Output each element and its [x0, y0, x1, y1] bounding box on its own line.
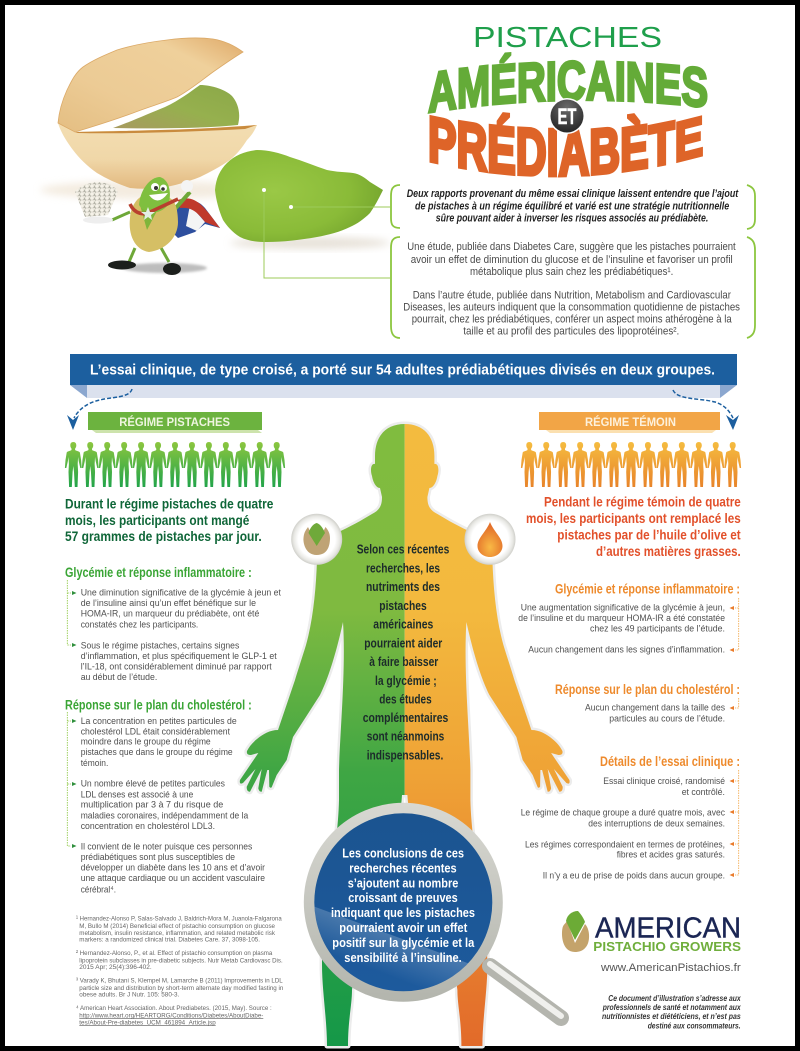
study descriptions: [403, 241, 740, 337]
footnotes: tes/About-Pre-diabetes_UCM_461894_Article.jsp: [79, 1019, 216, 1026]
lens text: recherches récentes: [349, 861, 457, 875]
center body text: indispensables.: [367, 748, 443, 762]
title line: prédiabète: P: [428, 103, 456, 180]
title: [428, 22, 708, 190]
disclaimer: nutritionnistes et diététiciens, et n’est pas: [602, 1012, 741, 1021]
title line: prédiabète: R: [456, 107, 487, 185]
icon: pistachio badge: [291, 514, 342, 565]
heading: cholesterol: Réponse sur le plan du cholestérol :: [555, 682, 740, 697]
footnotes: M, Bullo M (2014) Beneficial effect of pistachio consumption on glucose: [79, 923, 275, 930]
title line: pistaches: PISTACHES: [473, 22, 662, 54]
center body text: pourraient aider: [364, 636, 442, 650]
title line: américaines: I: [546, 51, 557, 113]
study descriptions: pourrait, chez les prédiabétiques, conférer un aspect moins athérogène à la: [412, 314, 732, 326]
illustration: pistachio kernel with callout lines: [215, 150, 390, 278]
logo: American Pistachio Growers: [562, 911, 741, 954]
text: glycemia findings: HOMA-IR, un marqueur du prédiabète, ont été: [81, 609, 259, 620]
text: cholesterol findings: moindre dans le groupe du régime: [81, 737, 211, 748]
study descriptions: métabolique plus sain chez les prédiabétiques¹.: [470, 266, 673, 278]
heading: pistachio diet statement: Durant le régime pistaches de quatre: [65, 495, 273, 511]
lens handle: [490, 964, 561, 1018]
study descriptions: avoir un effet de diminution du glucose et de l’insuline et favoriser un profil: [411, 254, 733, 266]
text: cholesterol findings: particules au cours de l’étude.: [609, 714, 725, 725]
icon: oil drop badge: [464, 514, 516, 565]
lens text: s’ajoutent au nombre: [348, 876, 458, 890]
text: cholesterol findings: maladies coronaires, indépendamment de la: [81, 810, 249, 821]
center body text: Selon ces récentes: [357, 542, 449, 556]
center body text: recherches, les: [366, 561, 440, 575]
text: trial details: Essai clinique croisé, randomisé: [603, 776, 725, 787]
lens text: pourraient avoir un effet: [339, 921, 468, 935]
title line: américaines: [428, 50, 708, 125]
text: glycemia findings: [81, 588, 281, 683]
heading: control diet statement: d’autres matières grasses.: [596, 543, 741, 559]
text: cholesterol findings: cholestérol LDL était considérablement: [81, 726, 230, 737]
website url: www.AmericanPistachios.fr: [600, 962, 741, 974]
text: cholesterol findings: développer un diabète dans les 10 ans et d’avoir: [81, 863, 266, 874]
footnotes: ¹ Hernandez-Alonso P, Salas-Salvado J, Baldrich-Mora M, Juanola-Falgarona: [76, 916, 282, 923]
title line: américaines: A: [428, 59, 457, 125]
heading: control diet statement: mois, les participants ont remplacé les: [526, 510, 741, 526]
text: cholesterol findings: une attaque cardiaque ou un accident vasculaire: [81, 873, 265, 884]
text: cholesterol findings: Il convient de le noter puisque ces personnes: [81, 842, 252, 853]
lens text: [331, 846, 475, 965]
title line: américaines: A: [586, 50, 615, 113]
center body text: sont néanmoins: [367, 730, 444, 744]
lens text: sensibilité à l’insuline.: [344, 951, 462, 965]
text: trial details: Il n’y a eu de prise de poids dans aucun groupe.: [543, 871, 725, 882]
logo subtitle: PISTACHIO GROWERS: [593, 939, 741, 954]
text: glycemia findings: Sous le régime pistaches, certains signes: [81, 641, 239, 652]
disclaimer: Ce document d’illustration s’adresse aux: [608, 994, 741, 1003]
title badge: et: ET: [558, 104, 577, 129]
text: trial details: des interruptions de deux semaines.: [588, 818, 725, 829]
heading: pistachio diet statement: 57 grammes de pistaches par jour.: [65, 528, 262, 544]
text: glycemia findings: chez les 49 participants de l’étude.: [590, 624, 725, 635]
heading: control diet statement: Pendant le régime témoin de quatre: [544, 494, 741, 510]
study descriptions: Diseases, les auteurs indiquent que la consommation quotidienne de pistaches: [403, 302, 740, 314]
heading: control diet statement: pistaches par de l’huile d’olive et: [557, 526, 741, 542]
panel: pistachio diet results: [65, 565, 281, 895]
center body text: [357, 542, 449, 762]
footnotes: obese adults. Br J Nutr. 105: 580-3.: [79, 992, 179, 999]
title line: américaines: N: [626, 51, 655, 115]
center body text: la glycémie ;: [375, 674, 437, 688]
heading: glycemia: Glycémie et réponse inflammatoire :: [65, 565, 252, 580]
banner: L’essai clinique, de type croisé, a porté sur 54 adultes prédiabétiques divisés en deux groupes.: [90, 361, 715, 378]
magnifying glass callout: [304, 803, 561, 1018]
title line: prédiabète: A: [558, 115, 589, 190]
heading: pistachio diet statement: [65, 495, 273, 544]
label: pistachio diet: RÉGIME PISTACHES: [119, 414, 230, 429]
heading: control diet statement: [526, 494, 741, 559]
disclaimer: destiné aux consommateurs.: [648, 1021, 741, 1030]
text: cholesterol findings: multiplication par 3 à 7 du risque de: [81, 800, 223, 811]
label: control diet: RÉGIME TÉMOIN: [585, 414, 676, 429]
title line: prédiabète: D: [516, 115, 547, 190]
bracket: right top: [747, 185, 755, 229]
intro summary: [407, 188, 739, 225]
panel: control diet results: [518, 581, 740, 882]
footnotes: [76, 916, 283, 1026]
text: glycemia findings: de l’insuline et du marqueur HOMA-IR a été constatée: [518, 613, 725, 624]
footnotes: lipoprotein subclasses in pre-diabetic subjects. Nutr Metab Cardiovasc Dis.: [79, 958, 283, 965]
text: glycemia findings: constatés chez les participants.: [81, 620, 198, 631]
text: cholesterol findings: La concentration en petites particules de: [81, 716, 237, 727]
center body text: des études: [379, 692, 432, 706]
title line: américaines: M: [457, 55, 490, 121]
text: cholesterol findings: Un nombre élevé de petites particules: [81, 779, 225, 790]
title badge: et: [549, 98, 585, 134]
text: glycemia findings: Aucun changement dans les signes d’inflammation.: [528, 645, 725, 656]
label: control diet: [539, 412, 720, 433]
title line: prédiabète: È: [620, 112, 649, 185]
title line: américaines: R: [517, 51, 546, 115]
title line: prédiabète: [428, 103, 703, 190]
body: right orange half: [405, 424, 570, 1046]
footnotes: metabolism, insulin resistance, inflammation, and related metabolic risk: [79, 930, 276, 937]
text: cholesterol findings: pistaches que dans le groupe du régime: [81, 747, 233, 758]
title line: américaines: C: [557, 50, 586, 113]
text: cholesterol findings: cérébral⁴.: [81, 884, 116, 895]
people: control group: [521, 442, 741, 487]
logo wordmark: AMERICAN: [595, 913, 741, 945]
title line: américaines: S: [681, 55, 708, 120]
bullets: [730, 606, 734, 877]
text: glycemia findings: de l’insuline ainsi qu’un effet bénéfique sur le: [81, 598, 256, 609]
banner: [70, 354, 737, 398]
body silhouette: [240, 424, 570, 1046]
text: cholesterol findings: concentration en cholestérol LDL3.: [81, 821, 215, 832]
text: cholesterol findings: [81, 716, 266, 895]
title line: américaines: I: [615, 51, 626, 113]
text: glycemia findings: au début de l’étude.: [81, 672, 157, 683]
center body text: complémentaires: [363, 711, 448, 725]
label: pistachio diet: [88, 412, 262, 433]
illustration: pistachio in shell: [40, 38, 260, 199]
footnotes: ³ Varady K, Bhutani S, Klempel M, Lamarche B (2011) Improvements in LDL: [76, 978, 283, 985]
lens text: positif sur la glycémie et la: [332, 936, 475, 950]
text: cholesterol findings: [585, 703, 725, 725]
text: trial details: Le régime de chaque groupe a duré quatre mois, avec: [521, 808, 725, 819]
bracket: left bottom: [391, 237, 400, 338]
mascot: superhero pistachio: [75, 177, 220, 275]
heading: pistachio diet statement: mois, les participants ont mangé: [65, 512, 249, 528]
bullets: [72, 591, 76, 848]
text: trial details: [521, 776, 725, 882]
title line: prédiabète: E: [675, 105, 703, 174]
text: cholesterol findings: témoin.: [81, 758, 108, 769]
body: left green half: [240, 424, 405, 1046]
text: cholesterol findings: Aucun changement dans la taille des: [585, 703, 725, 714]
footnotes: 2015 Apr; 25(4):396-402.: [79, 964, 152, 971]
study descriptions: Une étude, publiée dans Diabetes Care, suggère que les pistaches pourraient: [407, 241, 736, 253]
intro summary: de pistaches à un régime équilibré et varié est une stratégie nutritionnelle: [415, 200, 729, 212]
footnotes: http://www.heart.org/HEARTORG/Conditions/Diabetes/AboutDiabe-: [79, 1012, 263, 1019]
text: glycemia findings: d’inflammation, et plus spécifiquement le GLP-1 et: [81, 651, 277, 662]
lens text: indiquant que les pistaches: [331, 906, 475, 920]
text: cholesterol findings: LDL denses est associé à une: [81, 789, 193, 800]
logo icon: [562, 911, 589, 952]
center body text: américaines: [373, 617, 433, 631]
text: trial details: fibres et acides gras saturés.: [617, 850, 725, 861]
text: cholesterol findings: prédiabétiques sont plus susceptibles de: [81, 852, 235, 863]
footnotes: ² Hernandez-Alonso, P., et al. Effect of pistachio consumption on plasma: [76, 950, 272, 957]
text: trial details: et contrôlé.: [682, 787, 725, 798]
title line: prédiabète: T: [649, 108, 675, 179]
study descriptions: taille et au profil des particules des lipoprotéines².: [463, 325, 679, 337]
title line: américaines: É: [490, 53, 517, 117]
disclaimer: professionnels de santé et notamment aux: [602, 1003, 741, 1012]
footnotes: particle size and distribution by short-term alternate day modified fasting in: [79, 985, 283, 992]
lens text: Les conclusions de ces: [342, 846, 464, 860]
disclaimer: [602, 994, 741, 1030]
title line: américaines: E: [655, 53, 681, 117]
footnotes: markers: a randomized clinical trial. Diabetes Care. 37, 3098-105.: [79, 937, 260, 944]
lens text: croissant de preuves: [348, 891, 458, 905]
footnotes: ⁴ American Heart Association. About Prediabetes. (2015, May). Source :: [76, 1005, 272, 1012]
intro text with brackets: [391, 185, 755, 338]
heading: glycemia: Glycémie et réponse inflammatoire :: [555, 581, 740, 596]
study descriptions: Dans l’autre étude, publiée dans Nutrition, Metabolism and Cardiovascular: [413, 290, 731, 302]
title line: prédiabète: B: [589, 115, 620, 188]
people: pistachio group: [65, 442, 285, 487]
heading: trial details: Détails de l’essai clinique :: [600, 754, 740, 769]
title line: prédiabète: É: [487, 112, 516, 188]
center body text: nutriments des: [366, 580, 440, 594]
arrow: to pistachio diet: [67, 389, 132, 430]
text: glycemia findings: l’IL-18, ont considérablement diminué par rapport: [81, 661, 272, 672]
center body text: pistaches: [379, 599, 427, 613]
heading: cholesterol: Réponse sur le plan du cholestérol :: [65, 697, 252, 712]
intro summary: sûre pouvant aider à inverser les risques associés au prédiabète.: [436, 213, 708, 225]
arrow: to control diet: [673, 390, 739, 430]
bracket: right bottom: [747, 237, 755, 338]
title line: prédiabète: I: [547, 116, 558, 189]
bracket: left top: [391, 185, 400, 228]
text: glycemia findings: Une augmentation significative de la glycémie à jeun,: [521, 603, 725, 614]
center body text: à faire baisser: [369, 655, 438, 669]
text: glycemia findings: [518, 603, 725, 656]
text: glycemia findings: Une diminution significative de la glycémie à jeun et: [81, 588, 281, 599]
text: trial details: Les régimes correspondaient en termes de protéines,: [525, 839, 725, 850]
